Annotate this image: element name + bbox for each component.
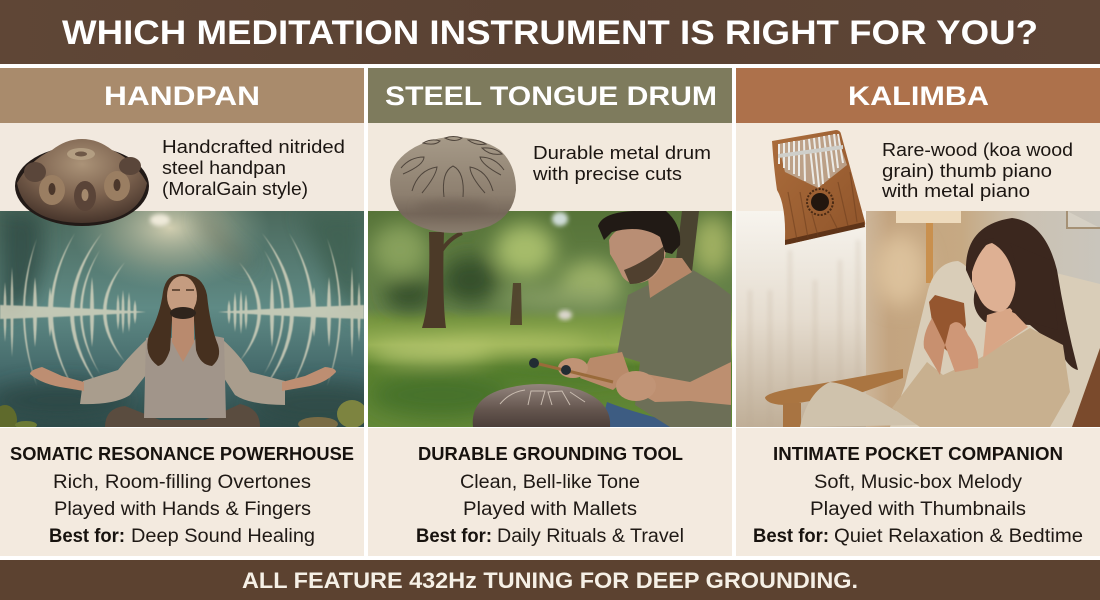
armchair — [765, 261, 1100, 427]
heading: steel tongue drum — [368, 68, 732, 123]
seated woman — [800, 218, 1078, 427]
drum in lap — [473, 384, 610, 427]
seated man — [529, 211, 731, 427]
description band: drum — [368, 123, 732, 211]
text block: kalimba details: Quiet Relaxation & Bedtime — [834, 526, 1083, 547]
heading: steel tongue drum: STEEL TONGUE DRUM — [385, 81, 717, 111]
footer text: ALL FEATURE 432Hz TUNING FOR DEEP GROUNDING. — [242, 568, 858, 593]
park trees — [422, 211, 699, 328]
panel: handpan — [0, 68, 390, 556]
text block: drum details: Clean, Bell-like Tone — [460, 472, 640, 493]
meditating man — [30, 274, 336, 427]
text block: handpan details: Best for: — [49, 526, 125, 547]
text block: handpan details: Deep Sound Healing — [131, 526, 315, 547]
picture frame — [1067, 211, 1100, 228]
description band: handpan — [0, 123, 364, 211]
footer bar — [0, 560, 1100, 600]
heading: handpan: HANDPAN — [104, 81, 260, 111]
text block: handpan details: Rich, Room-filling Overtones — [53, 472, 311, 493]
photo: woman with kalimba in armchair — [736, 211, 1100, 427]
text block: kalimba details: Best for: — [753, 526, 829, 547]
description band: drum: with precise cuts — [532, 164, 682, 184]
title: WHICH MEDITATION INSTRUMENT IS RIGHT FOR YOU? — [62, 14, 1038, 52]
panel: kalimba — [736, 68, 1100, 556]
text block: kalimba details — [736, 428, 1100, 556]
text block: drum details: Daily Rituals & Travel — [497, 526, 684, 547]
heading: handpan — [0, 68, 364, 123]
description band: kalimba: Rare-wood (koa wood — [882, 140, 1073, 160]
text block: handpan details: SOMATIC RESONANCE POWERHOUSE — [10, 444, 354, 464]
description band: kalimba — [736, 123, 1100, 211]
description band: kalimba: with metal piano — [881, 181, 1030, 201]
description band: handpan: (MoralGain style) — [162, 179, 308, 199]
heading: kalimba — [736, 68, 1100, 123]
text block: kalimba details: Played with Thumbnails — [810, 499, 1026, 520]
text block: kalimba details: Soft, Music-box Melody — [814, 472, 1023, 493]
text block: drum details: DURABLE GROUNDING TOOL — [418, 444, 683, 464]
title bar — [0, 0, 1100, 64]
description band: drum: Durable metal drum — [533, 143, 711, 163]
description band: handpan: steel handpan — [162, 158, 286, 178]
floor lamp — [896, 211, 961, 283]
panel: steel tongue drum — [368, 68, 732, 556]
curtain — [736, 211, 866, 427]
text block: kalimba details: INTIMATE POCKET COMPANION — [773, 444, 1063, 464]
text block: drum details: Played with Mallets — [463, 499, 637, 520]
description band: kalimba: grain) thumb piano — [882, 161, 1052, 181]
icon: handpan instrument — [15, 139, 149, 226]
icon: kalimba instrument — [772, 130, 865, 245]
sound wave left and right — [0, 233, 364, 391]
heading: kalimba: KALIMBA — [848, 81, 989, 111]
text block: drum details: Best for: — [416, 526, 492, 547]
photo: man meditating with sound waves — [0, 211, 364, 427]
photo: man playing drum in park — [368, 211, 732, 427]
text block: handpan details — [0, 428, 364, 556]
icon: steel tongue drum — [390, 136, 516, 233]
text block: drum details — [368, 428, 732, 556]
description band: handpan: Handcrafted nitrided — [162, 137, 345, 157]
text block: handpan details: Played with Hands & Fingers — [54, 499, 311, 520]
plants — [0, 400, 364, 427]
